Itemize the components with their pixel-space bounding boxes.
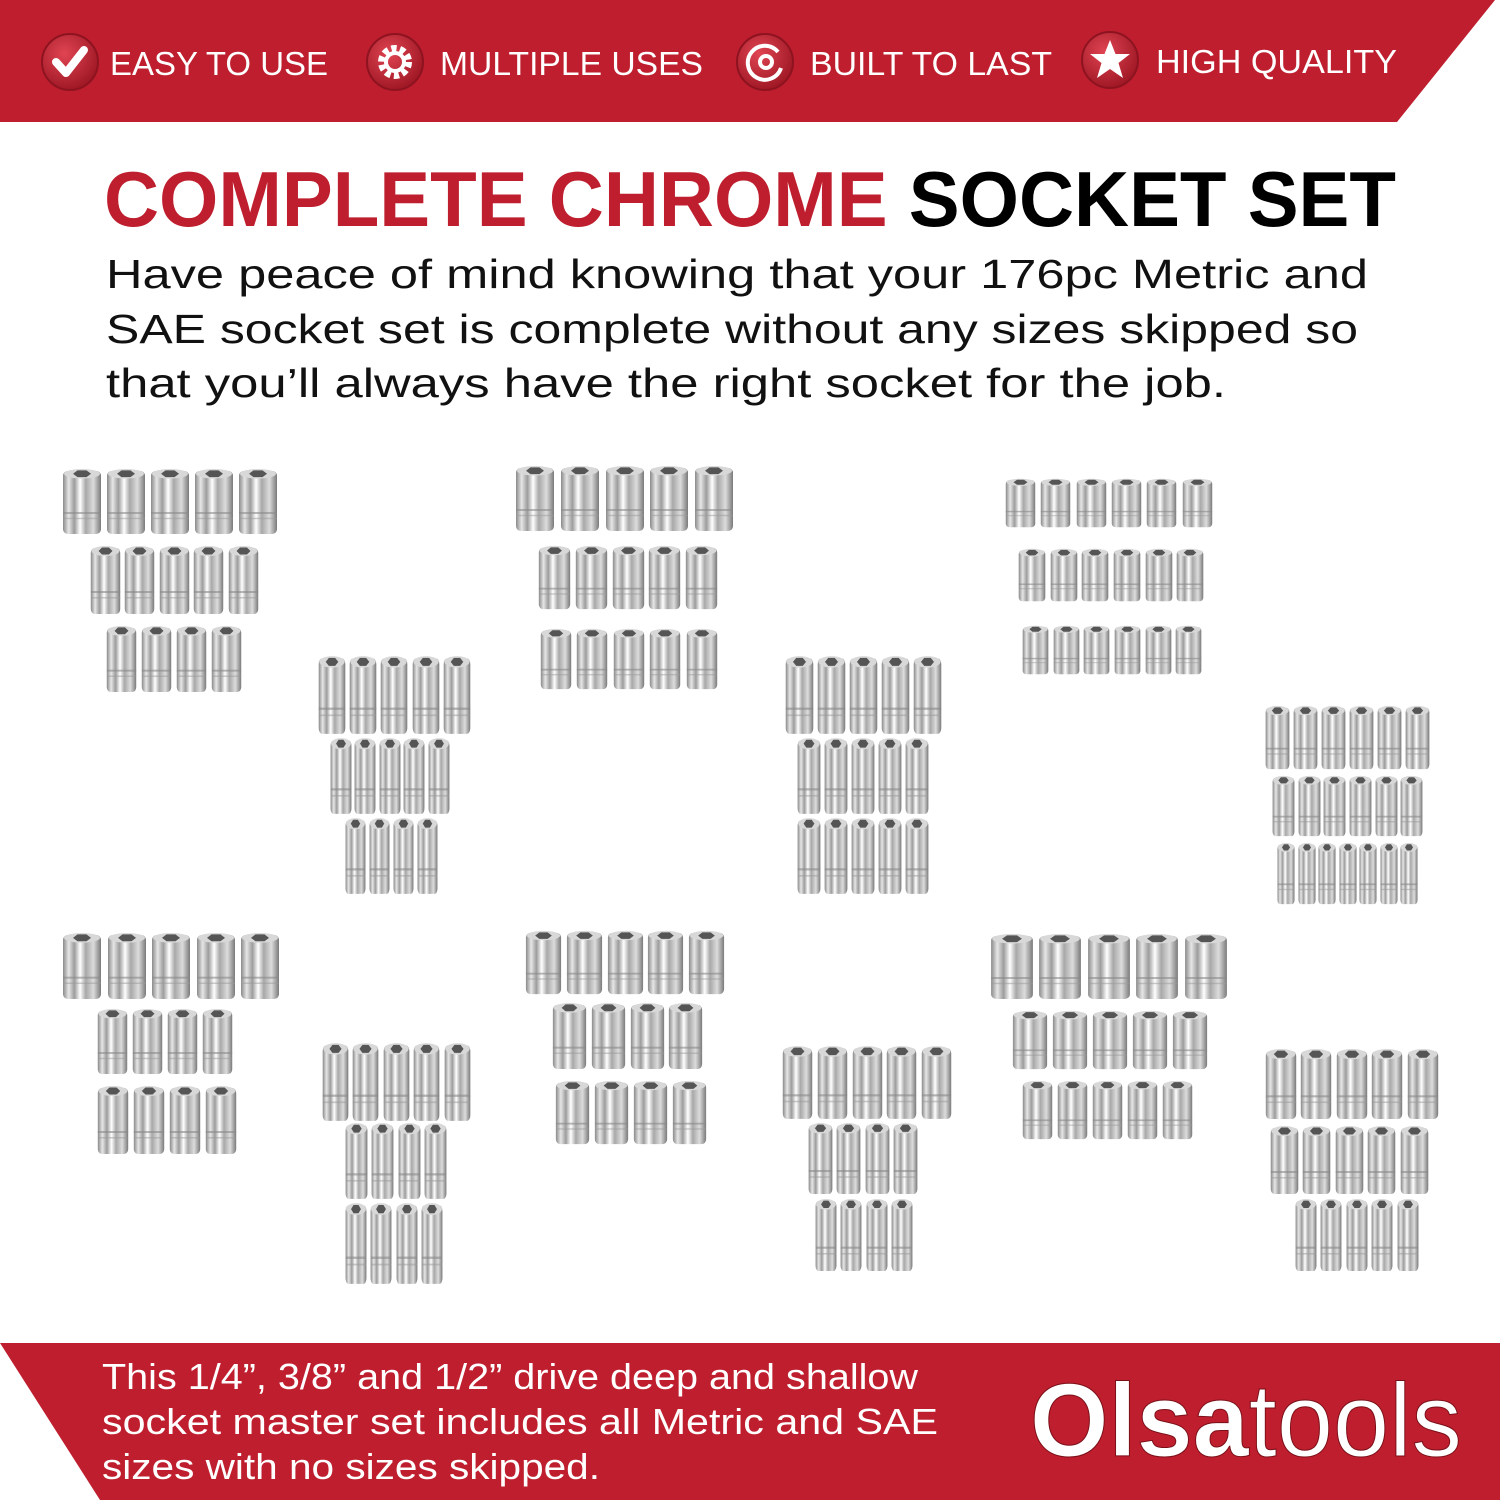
socket group 6 [1266, 706, 1429, 904]
feature: easy to use: EASY TO USE [110, 45, 328, 82]
socket group 1 [63, 469, 277, 692]
feature: multiple uses: MULTIPLE USES [440, 45, 703, 82]
description text: SAE socket set is complete without any sizes skipped so [106, 306, 1358, 352]
socket group 4 [786, 656, 941, 894]
bottom banner [0, 1343, 1500, 1500]
icon: checkmark [42, 34, 98, 90]
icon: cycle gear [737, 34, 793, 90]
icon: star [1082, 32, 1138, 88]
socket group 3 [516, 466, 733, 689]
bottom description text: This 1/4”, 3/8” and 1/2” drive deep and shallow [102, 1356, 919, 1397]
socket group 11 [991, 934, 1227, 1139]
socket group 10 [783, 1046, 951, 1271]
title: COMPLETE CHROME SOCKET SET [104, 155, 1396, 243]
feature: built to last: BUILT TO LAST [810, 45, 1052, 82]
feature: high quality: HIGH QUALITY [1156, 43, 1397, 80]
bottom description text: socket master set includes all Metric and SAE [102, 1401, 938, 1442]
socket image grid [63, 466, 1438, 1284]
socket group 8 [323, 1043, 470, 1284]
description text: that you’ll always have the right socket for the job. [106, 360, 1226, 406]
socket group 5 [1006, 479, 1212, 674]
description text [106, 251, 1368, 406]
top banner [0, 0, 1495, 122]
socket group 12 [1266, 1049, 1438, 1271]
logo: Olsatools: Olsatools [1030, 1363, 1462, 1479]
icon: gear [367, 34, 423, 90]
socket group 2 [319, 656, 470, 894]
bottom description text [102, 1356, 938, 1487]
description text: Have peace of mind knowing that your 176pc Metric and [106, 251, 1368, 297]
bottom description text: sizes with no sizes skipped. [102, 1446, 600, 1487]
socket group 9 [526, 931, 724, 1144]
socket group 7 [63, 933, 279, 1154]
